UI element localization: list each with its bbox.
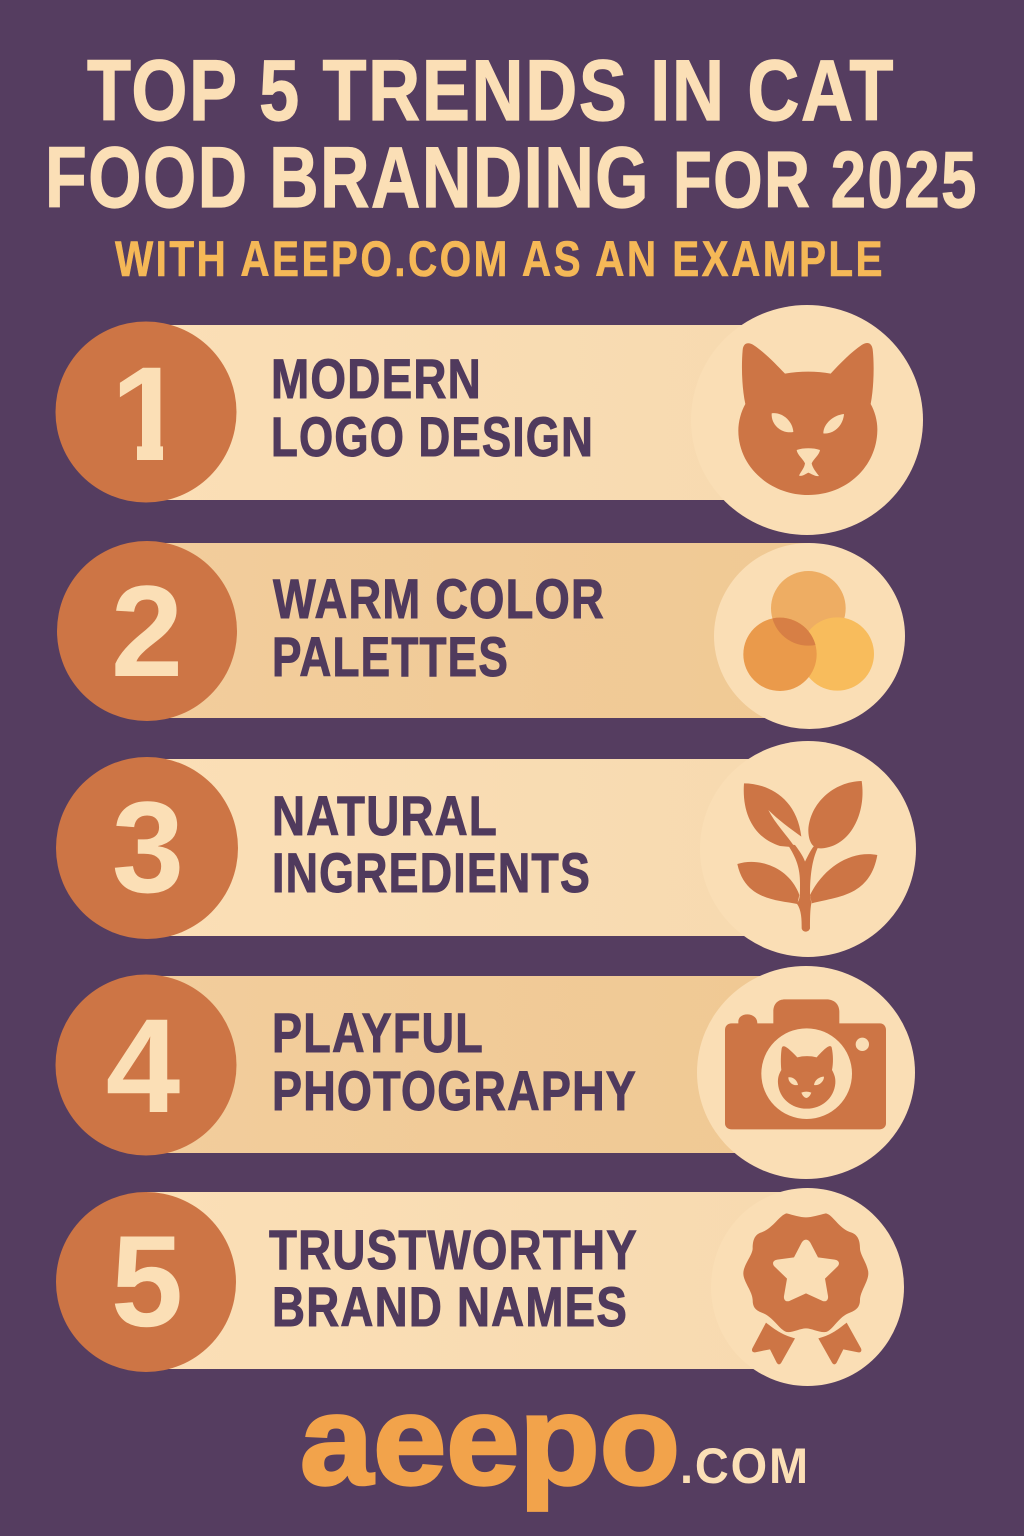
icon: camera with cat: [697, 966, 915, 1179]
label: warm color palettes: PALETTES: [272, 625, 509, 688]
title: TOP 5 TRENDS IN CAT: [87, 43, 895, 139]
label: natural ingredients: [272, 784, 591, 904]
panel: trend 4 playful photography: [56, 966, 915, 1179]
label: playful photography: [272, 1001, 637, 1122]
number badge 1: 1: [111, 340, 185, 489]
number badge 3: 3: [112, 774, 184, 920]
icon: overlapping colour circles: [714, 543, 905, 729]
panel: trend 5 trustworthy brand names: [56, 1188, 904, 1386]
title: [45, 43, 978, 226]
label: playful photography: PHOTOGRAPHY: [272, 1059, 637, 1122]
label: trustworthy brand names: BRAND NAMES: [272, 1275, 628, 1338]
label: trustworthy brand names: [269, 1218, 638, 1338]
number badge 4: 4: [106, 992, 180, 1141]
panel: trend 1 modern logo design: [56, 305, 923, 535]
label: playful photography: PLAYFUL: [272, 1001, 484, 1064]
panel: trend 3 natural ingredients: [56, 741, 916, 957]
icon: cat face: [691, 305, 923, 535]
number badge 2: 2: [111, 558, 183, 704]
label: modern logo design: [271, 347, 594, 468]
icon: award rosette with star: [711, 1188, 904, 1386]
label: modern logo design: MODERN: [271, 347, 482, 410]
label: trustworthy brand names: TRUSTWORTHY: [269, 1218, 638, 1281]
number badge 3: [56, 757, 238, 939]
brand logo: aeepo.com: .COM: [680, 1438, 810, 1494]
number badge 5: [56, 1192, 236, 1372]
number badge 4: [56, 974, 236, 1156]
label: warm color palettes: WARM COLOR: [273, 567, 605, 630]
brand logo: aeepo.com: aeepo: [300, 1369, 680, 1511]
title: FOOD BRANDING: [45, 130, 650, 226]
number badge 1: [56, 322, 236, 502]
label: natural ingredients: NATURAL: [272, 784, 498, 847]
label: natural ingredients: INGREDIENTS: [272, 841, 591, 904]
icon: leafy plant: [700, 741, 916, 957]
number badge 5: 5: [111, 1208, 183, 1354]
label: modern logo design: LOGO DESIGN: [271, 405, 594, 468]
panel: trend 2 warm color palettes: [57, 541, 905, 729]
number badge 2: [57, 541, 237, 721]
label: warm color palettes: [272, 567, 605, 688]
